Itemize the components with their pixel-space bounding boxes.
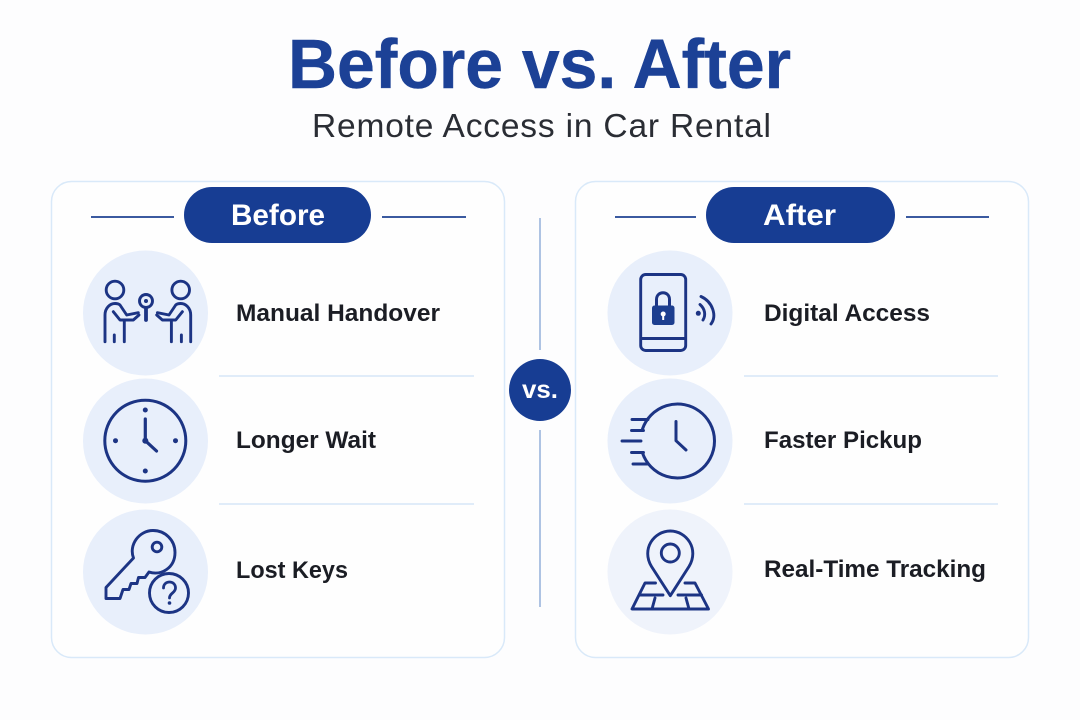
icon: faster pickup clock	[608, 378, 732, 504]
label: faster pickup: Faster Pickup	[764, 427, 922, 454]
before heading pill: Before	[231, 199, 325, 232]
icon: digital access phone	[608, 250, 732, 376]
label: longer wait: Longer Wait	[236, 427, 376, 454]
label: digital access: Digital Access	[764, 300, 930, 327]
icon: longer wait clock	[83, 378, 208, 504]
panel: after	[576, 182, 1028, 658]
subtitle: Remote Access in Car Rental	[312, 108, 771, 145]
icon: lost keys	[83, 510, 208, 634]
title: Before vs. After	[288, 25, 791, 103]
label: lost keys: Lost Keys	[236, 557, 348, 584]
icon: real-time tracking map pin	[608, 510, 732, 634]
vs. badge: vs.	[522, 376, 558, 404]
center divider	[539, 218, 541, 607]
label: real-time tracking: Real-Time Tracking	[764, 556, 986, 583]
after heading pill: After	[763, 199, 836, 232]
before heading pill	[184, 187, 371, 243]
after heading pill	[706, 187, 895, 243]
icon: manual handover	[83, 250, 208, 376]
vs. badge	[509, 359, 571, 421]
panel: before	[52, 182, 504, 658]
label: manual handover: Manual Handover	[236, 300, 440, 327]
